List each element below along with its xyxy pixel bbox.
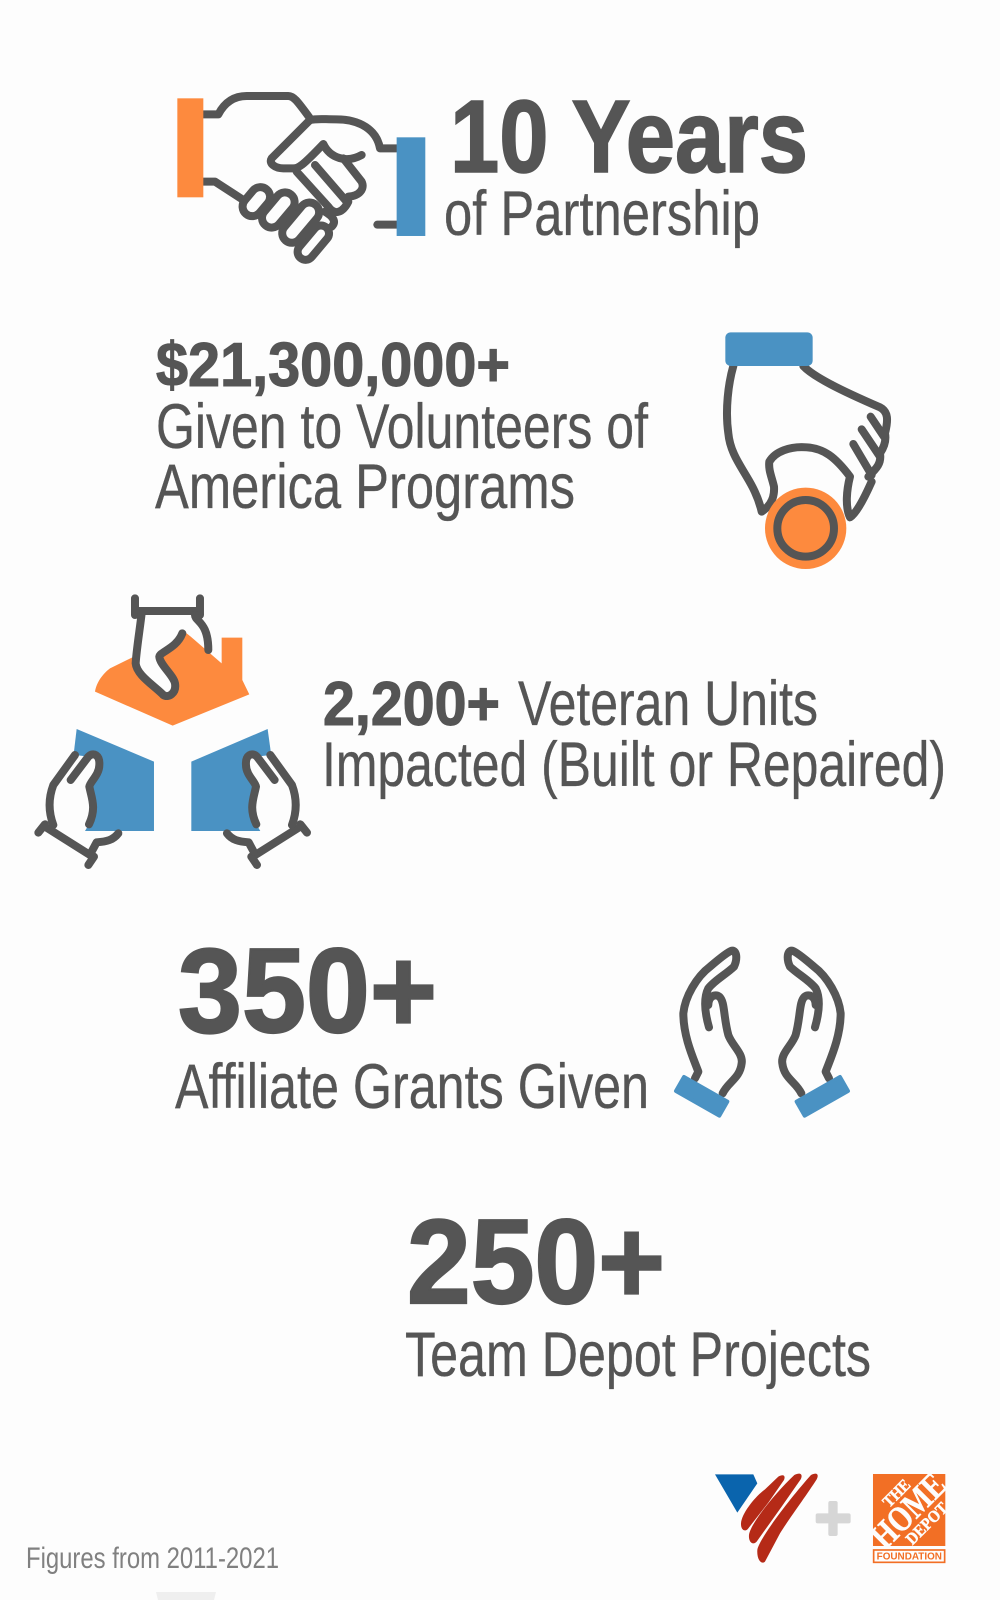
text: America Programs: America Programs [155, 452, 575, 522]
roof [95, 632, 249, 726]
icon: hands assembling a house [38, 598, 307, 865]
logo: The Home Depot Foundation [862, 1465, 954, 1563]
logo: The Home Depot Foundation: HOME [862, 1465, 954, 1556]
subtitle: of Partnership: of Partnership [444, 179, 760, 249]
stat: 350+: 350+ [178, 924, 437, 1058]
cropped shape at bottom edge [156, 1592, 216, 1600]
right wall and hand [191, 729, 307, 865]
stat: 250+: 250+ [407, 1195, 665, 1329]
text: Team Depot Projects: Team Depot Projects [405, 1320, 871, 1390]
icon: plus sign [816, 1501, 851, 1536]
stat: 2,200+: 2,200+ [323, 670, 500, 739]
text: Given to Volunteers of: Given to Volunteers of [156, 392, 648, 462]
icon: hand holding coin [725, 332, 887, 569]
icon: open hands [676, 951, 848, 1116]
title: 10 Years: 10 Years [450, 79, 808, 194]
left wall and hand [38, 729, 154, 865]
stat: $21,300,000+: $21,300,000+ [156, 331, 510, 400]
footnote: figures from 2011-2021: Figures from 2011-2021 [26, 1542, 279, 1575]
text: Affiliate Grants Given: Affiliate Grants Given [175, 1052, 649, 1122]
logo: The Home Depot Foundation: FOUNDATION [877, 1552, 942, 1563]
logo: The Home Depot Foundation: DEPOT [902, 1498, 952, 1548]
icon: handshake [177, 96, 425, 263]
top hand [135, 598, 208, 696]
text: Veteran Units: Veteran Units [518, 669, 818, 739]
logo: Volunteers of America [715, 1474, 818, 1563]
logo: The Home Depot Foundation: THE [879, 1475, 914, 1511]
